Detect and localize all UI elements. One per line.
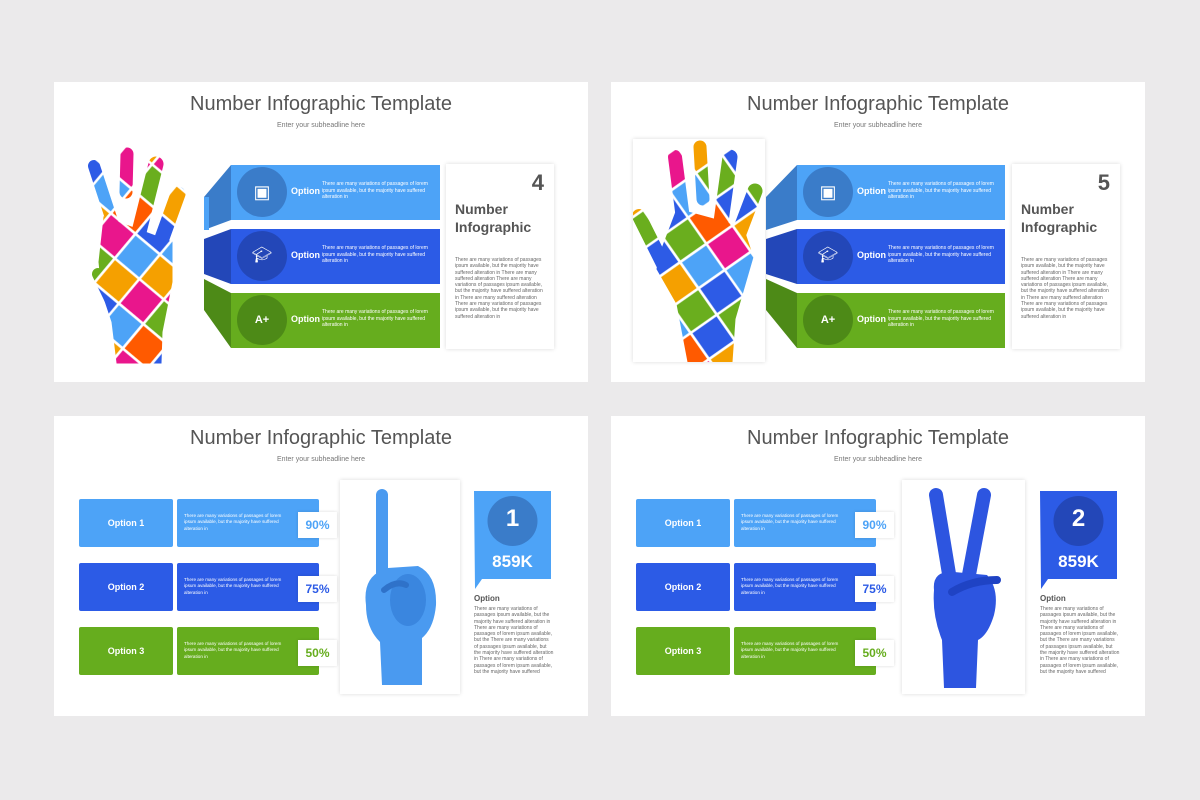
subtitle: Enter your subheadline here — [277, 456, 365, 463]
option description: There are many variations of passages ipsum available, but the majority have suffered alteration in There are many variations of passages of lorem ipsum available, but the There are many variations of passages ipsum available, but the majority have suffered alteration in There are many variations of passages of lorem ipsum available, but the majority have suffered — [474, 606, 553, 675]
number flag: 859K — [1058, 552, 1099, 571]
title: Number Infographic Template — [190, 427, 452, 449]
icon: A+ book — [803, 295, 853, 345]
option 1 ribbon: Option — [291, 186, 320, 196]
option 3 ribbon — [797, 293, 1005, 348]
option 1 ribbon: Option — [857, 186, 886, 196]
option 1 row: 90% — [305, 518, 330, 532]
icon: graduate hands: 🎓︎ — [252, 247, 272, 264]
option 2 ribbon: Option — [291, 250, 320, 260]
info card: There are many variations of passages ipsum available, but the majority have suffered alteration in There are many suffered alteration There are many variations of passages ipsum available, but the majority have suffered alteration in There are many suffered alteration — [1021, 257, 1109, 301]
option 3 row — [79, 627, 338, 675]
ribbon folds — [766, 165, 797, 348]
subtitle: Enter your subheadline here — [834, 122, 922, 129]
option 3 ribbon: Option — [857, 314, 886, 324]
info card — [1012, 164, 1120, 349]
option 3 row: 50% — [862, 646, 887, 660]
icon: computer book: ▣ — [253, 182, 270, 202]
option 3 row: There are many variations of passages of lorem ipsum available, but the majority have suffered alteration in — [184, 641, 281, 659]
option 1 row: 90% — [862, 518, 887, 532]
option 2 ribbon: There are many variations of passages of lorem ipsum available, but the majority have suffered alteration in — [322, 245, 428, 264]
info card: 4 — [532, 170, 544, 195]
info card: 5 — [1098, 170, 1110, 195]
option 3 row: There are many variations of passages of lorem ipsum available, but the majority have suffered alteration in — [741, 641, 838, 659]
option 3 row: Option 3 — [108, 646, 144, 656]
option 1 row — [636, 499, 895, 547]
icon: computer book: ▣ — [819, 182, 836, 202]
option 2 ribbon — [797, 229, 1005, 284]
slide 2: colorful hand in card with number 5 — [611, 82, 1145, 382]
option 2 ribbon: There are many variations of passages of lorem ipsum available, but the majority have suffered alteration in — [888, 245, 994, 264]
option 1 row: Option 1 — [665, 518, 701, 528]
option 3 row: Option 3 — [665, 646, 701, 656]
icon: A+ book: A+ — [821, 314, 835, 326]
icon: graduate hands — [237, 231, 287, 281]
option 3 ribbon: There are many variations of passages of lorem ipsum available, but the majority have suffered alteration in — [322, 309, 428, 328]
info card: There are many variations of passages ipsum available, but the majority have suffered alteration in — [1021, 301, 1107, 320]
option 2 row — [636, 563, 895, 611]
slide 1: colorful hand with 3 options and number 4 — [54, 82, 588, 382]
icon: graduate hands — [803, 231, 853, 281]
icon: computer book — [803, 167, 853, 217]
title: Number Infographic Template — [747, 427, 1009, 449]
option 2 row: 75% — [305, 582, 330, 596]
info card — [446, 164, 554, 349]
option 2 ribbon: Option — [857, 250, 886, 260]
hand card: peace sign — [902, 480, 1025, 694]
info card: Infographic — [455, 219, 531, 235]
hand card: pointing finger — [340, 480, 460, 694]
subtitle: Enter your subheadline here — [834, 456, 922, 463]
title: Number Infographic Template — [747, 93, 1009, 115]
ribbon folds — [204, 165, 231, 348]
option 2 row: Option 2 — [665, 582, 701, 592]
hand card — [633, 139, 765, 362]
number flag: 2 — [1072, 505, 1085, 532]
title: Number Infographic Template — [190, 93, 452, 115]
icon: computer book — [237, 167, 287, 217]
option 2 row: Option 2 — [108, 582, 144, 592]
info card: Infographic — [1021, 219, 1097, 235]
option 1 ribbon — [797, 165, 1005, 220]
icon: graduate hands: 🎓︎ — [818, 247, 838, 264]
info card: Number — [1021, 201, 1074, 217]
info card: Number — [455, 201, 508, 217]
number flag — [474, 491, 551, 589]
option 1 row: Option 1 — [108, 518, 144, 528]
option 3 row — [636, 627, 895, 675]
number flag: 1 — [506, 505, 519, 532]
option 1 ribbon — [231, 165, 440, 220]
option 2 ribbon — [231, 229, 440, 284]
number flag — [1040, 491, 1117, 589]
info card: There are many variations of passages ipsum available, but the majority have suffered alteration in — [455, 301, 541, 320]
number flag: 859K — [492, 552, 533, 571]
slide 4: peace hand, number 2 — [611, 416, 1145, 716]
option 1 row: There are many variations of passages of lorem ipsum available, but the majority have suffered alteration in — [184, 513, 281, 531]
icon: A+ book — [237, 295, 287, 345]
option 1 row — [79, 499, 338, 547]
option 3 ribbon: There are many variations of passages of lorem ipsum available, but the majority have suffered alteration in — [888, 309, 994, 328]
mosaic hand — [633, 140, 762, 362]
option description: Option — [474, 594, 500, 603]
option 1 row: There are many variations of passages of lorem ipsum available, but the majority have suffered alteration in — [741, 513, 838, 531]
option 1 ribbon: There are many variations of passages of lorem ipsum available, but the majority have suffered alteration in — [888, 181, 994, 200]
option description: Option — [1040, 594, 1066, 603]
mosaic hand illustration — [88, 148, 186, 364]
option 2 row — [79, 563, 338, 611]
info card: There are many variations of passages ipsum available, but the majority have suffered alteration in There are many suffered alteration There are many variations of passages ipsum available, but the majority have suffered alteration in There are many suffered alteration — [455, 257, 543, 301]
option 1 ribbon: There are many variations of passages of lorem ipsum available, but the majority have suffered alteration in — [322, 181, 428, 200]
slide 3: pointing finger, number 1 — [54, 416, 588, 716]
option 3 row: 50% — [305, 646, 330, 660]
option 3 ribbon: Option — [291, 314, 320, 324]
option 3 ribbon — [231, 293, 440, 348]
option description: There are many variations of passages ipsum available, but the majority have suffered alteration in There are many variations of passages of lorem ipsum available, but the There are many variations of passages ipsum available, but the majority have suffered alteration in There are many variations of passages of lorem ipsum available, but the majority have suffered — [1040, 606, 1119, 675]
option 2 row: There are many variations of passages of lorem ipsum available, but the majority have suffered alteration in — [741, 577, 838, 595]
option 2 row: 75% — [862, 582, 887, 596]
icon: A+ book: A+ — [255, 314, 269, 326]
subtitle: Enter your subheadline here — [277, 122, 365, 129]
option 2 row: There are many variations of passages of lorem ipsum available, but the majority have suffered alteration in — [184, 577, 281, 595]
